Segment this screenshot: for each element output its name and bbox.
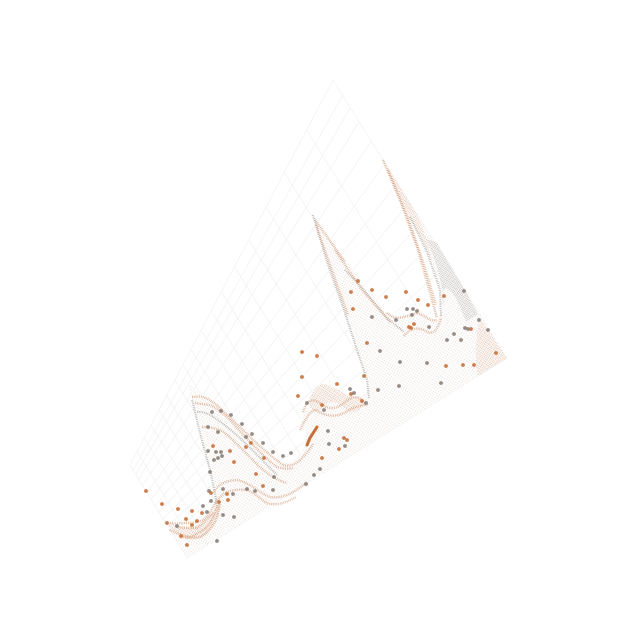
scatter points: orange: [144, 279, 498, 547]
dotted mesh surface: [165, 160, 507, 558]
ridges: orange contours: [170, 160, 441, 538]
scatter points: grey: [175, 289, 490, 543]
ridges: grey contours: [192, 215, 441, 507]
accent: heavy orange stroke: [307, 427, 317, 445]
background grid: [130, 80, 507, 558]
ridge lines: [170, 160, 441, 538]
shaded bands on the right spike: [165, 160, 507, 539]
